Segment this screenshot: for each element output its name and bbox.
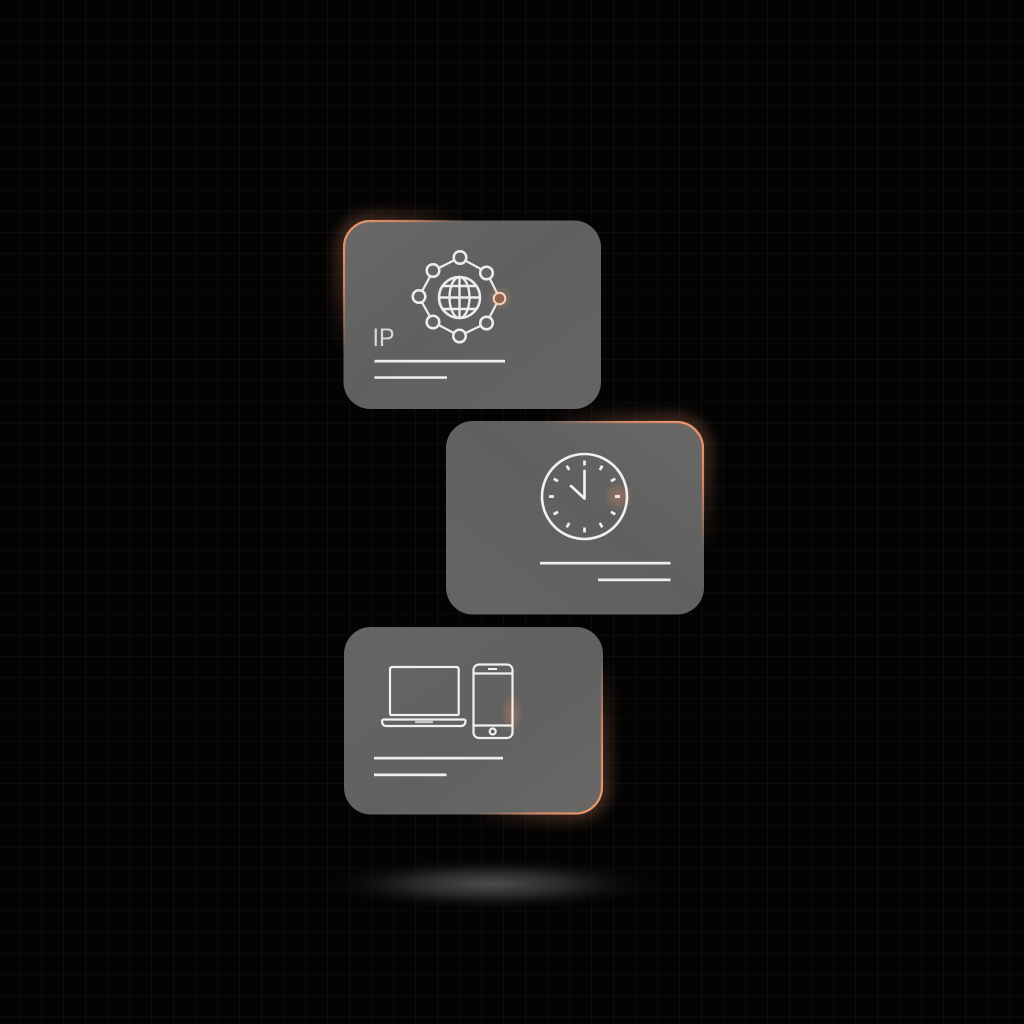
card 3 glow [344,627,603,814]
card 3 text lines [374,757,503,776]
card 1 orange edge [344,221,600,408]
card 3 surface [344,627,603,814]
panel: clock card [446,421,704,614]
icon: laptop and phone [382,664,523,738]
icon: network globe [413,251,513,342]
floor shadow glow [315,857,665,911]
icon: clock [542,454,633,539]
card 2 surface [446,421,704,614]
card 2 text lines [540,562,670,581]
card 1 surface [344,220,601,409]
card 2 orange edge [447,422,703,614]
card 2 glow [446,421,704,614]
label: IP: IP [372,324,394,352]
card 3 orange edge [345,628,602,814]
panel: IP card [343,220,601,409]
card 1 text lines [374,360,505,379]
panel: devices card [344,627,603,814]
card 1 glow [343,220,601,409]
